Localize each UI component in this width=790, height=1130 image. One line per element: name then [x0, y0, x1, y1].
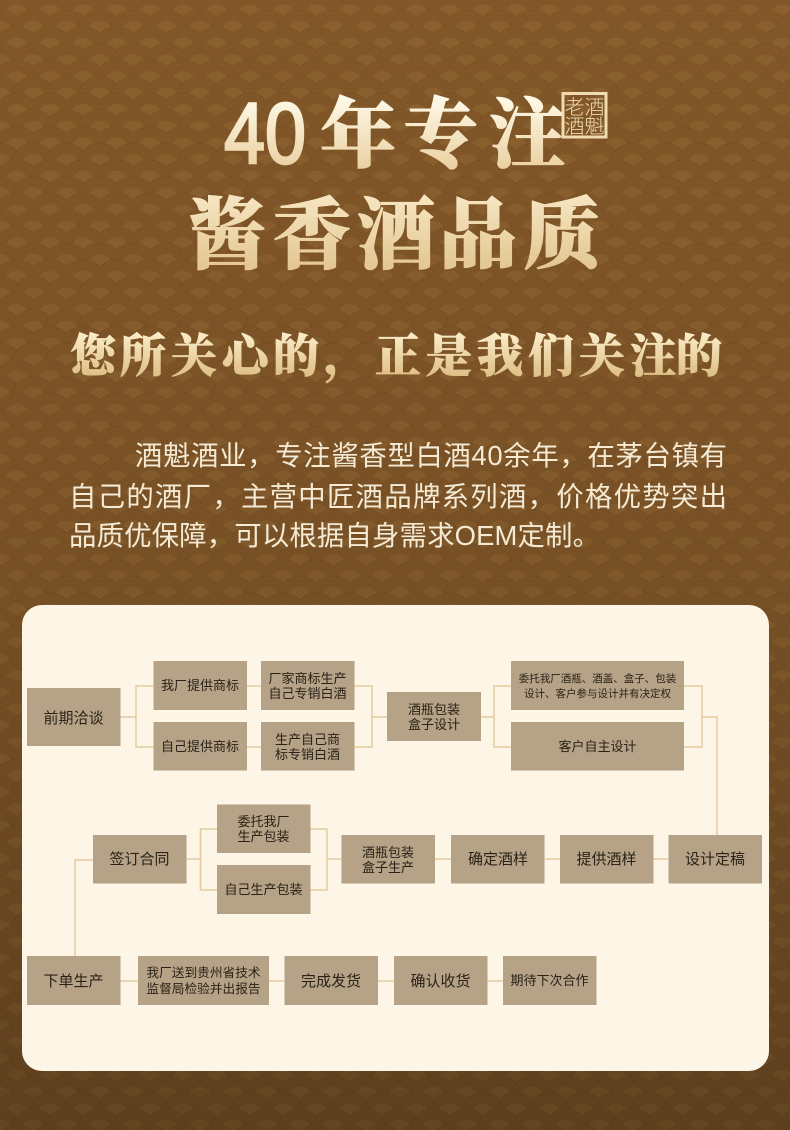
step: 客户自主设计	[511, 722, 684, 770]
subheading: 的	[273, 320, 319, 386]
subheading: ，	[324, 320, 370, 386]
title line 2: 香	[273, 173, 351, 285]
panel: process flow	[22, 605, 769, 1071]
subheading: 心	[222, 320, 276, 386]
step: 酒瓶包装盒子设计	[387, 692, 481, 741]
step: 期待下次合作: 期待下次合作	[510, 973, 589, 988]
step: 期待下次合作	[503, 956, 596, 1005]
step: 完成发货: 完成发货	[301, 973, 361, 990]
intro paragraph: 酒魁酒业，专注酱香型白酒40余年，在茅台镇有	[135, 440, 727, 471]
intro paragraph	[69, 440, 727, 551]
subheading: 所	[120, 320, 166, 386]
title line 1	[224, 74, 565, 183]
step: 我厂送到贵州省技术监督局检验并出报告: 我厂送到贵州省技术	[146, 966, 261, 980]
step: 生产自己商标	[261, 722, 354, 770]
title line 1: 注	[489, 74, 565, 183]
subheading: 的	[676, 320, 722, 386]
step: 下单生产: 下单生产	[43, 973, 104, 990]
connector lines: row 1	[120, 686, 717, 835]
step: 我厂送到贵州省技术监督局检验并出报告	[138, 956, 269, 1005]
intro paragraph: 品质优保障，可以根据自身需求OEM定制。	[69, 520, 600, 551]
step: 设计定稿	[668, 835, 762, 884]
step: 委托我厂设计: 设计、客户参与设计并有决定权	[524, 687, 671, 700]
step: 委托我厂生产包装	[217, 804, 310, 853]
step: 酒瓶包装盒子生产: 盒子生产	[362, 860, 414, 875]
step: 确认收货	[394, 956, 488, 1005]
step: 我厂提供商标: 我厂提供商标	[161, 678, 239, 693]
title line 1: 年	[320, 74, 396, 183]
step: 签订合同: 签订合同	[109, 851, 170, 868]
subheading: 注	[630, 320, 676, 386]
stamp: 老酒酒魁	[563, 91, 606, 139]
step: 委托我厂生产包装: 委托我厂	[237, 814, 290, 829]
step: 生产自己商标: 标专销白酒	[275, 747, 340, 762]
step: 提供酒样	[560, 835, 654, 884]
title line 2: 酒	[357, 173, 435, 285]
step: 自己提供商标: 自己提供商标	[161, 739, 239, 754]
subheading: 您	[70, 320, 120, 386]
step: 酒瓶包装盒子生产	[342, 835, 435, 884]
step: 下单生产	[27, 956, 120, 1005]
subheading	[70, 320, 722, 386]
connector lines: row 3	[120, 980, 503, 982]
step: 委托我厂设计	[511, 661, 684, 710]
intro paragraph: 自己的酒厂，主营中匠酒品牌系列酒，价格优势突出	[69, 481, 727, 512]
step: 完成发货	[284, 956, 378, 1005]
title line 2: 酱	[188, 173, 266, 285]
subheading: 我	[477, 320, 523, 386]
step: 厂家商标生产: 厂家商标生产	[268, 671, 347, 686]
step: 设计定稿: 设计定稿	[685, 851, 745, 868]
step: 酒瓶包装盒子设计: 酒瓶包装	[408, 702, 460, 717]
title line 2	[188, 173, 601, 285]
step: 酒瓶包装盒子设计: 盒子设计	[408, 717, 460, 732]
subheading: 关	[579, 320, 625, 386]
subheading: 正	[375, 320, 421, 386]
title line 2: 品	[439, 173, 517, 285]
subheading: 们	[528, 320, 574, 386]
step: 前期洽谈: 前期洽谈	[43, 710, 104, 727]
step: 客户自主设计: 客户自主设计	[558, 739, 637, 754]
step: 我厂提供商标	[154, 661, 247, 710]
subheading: 关	[171, 320, 217, 386]
stamp: 老酒酒魁: 酒	[564, 110, 584, 139]
step: 委托我厂生产包装: 生产包装	[237, 829, 290, 844]
stamp: 老酒酒魁: 老	[564, 91, 584, 120]
step: 自己提供商标	[154, 722, 247, 770]
connector lines: row 2	[75, 829, 668, 956]
step: 确定酒样	[451, 835, 544, 884]
step: 自己生产包装: 自己生产包装	[224, 882, 303, 897]
title line 1: 专	[403, 74, 479, 183]
stamp: 老酒酒魁: 魁	[584, 110, 604, 139]
subheading: 是	[426, 320, 472, 386]
step: 委托我厂设计: 委托我厂酒瓶、酒盖、盒子、包装	[519, 672, 677, 685]
stamp: 老酒酒魁: 酒	[584, 91, 604, 120]
step: 酒瓶包装盒子生产: 酒瓶包装	[362, 845, 414, 860]
step: 我厂送到贵州省技术监督局检验并出报告: 监督局检验并出报告	[146, 981, 261, 996]
step: 厂家商标生产: 自己专销白酒	[268, 686, 347, 701]
step: 生产自己商标: 生产自己商	[275, 732, 340, 747]
title line 2: 质	[523, 173, 601, 285]
step: 厂家商标生产	[261, 661, 354, 710]
step: 前期洽谈	[27, 688, 120, 746]
title line 1: 40	[224, 86, 306, 182]
step: 确定酒样: 确定酒样	[468, 851, 528, 868]
step: 自己生产包装	[217, 865, 310, 914]
step: 确认收货: 确认收货	[410, 973, 471, 990]
step: 签订合同	[93, 835, 186, 884]
step: 提供酒样: 提供酒样	[576, 851, 637, 868]
